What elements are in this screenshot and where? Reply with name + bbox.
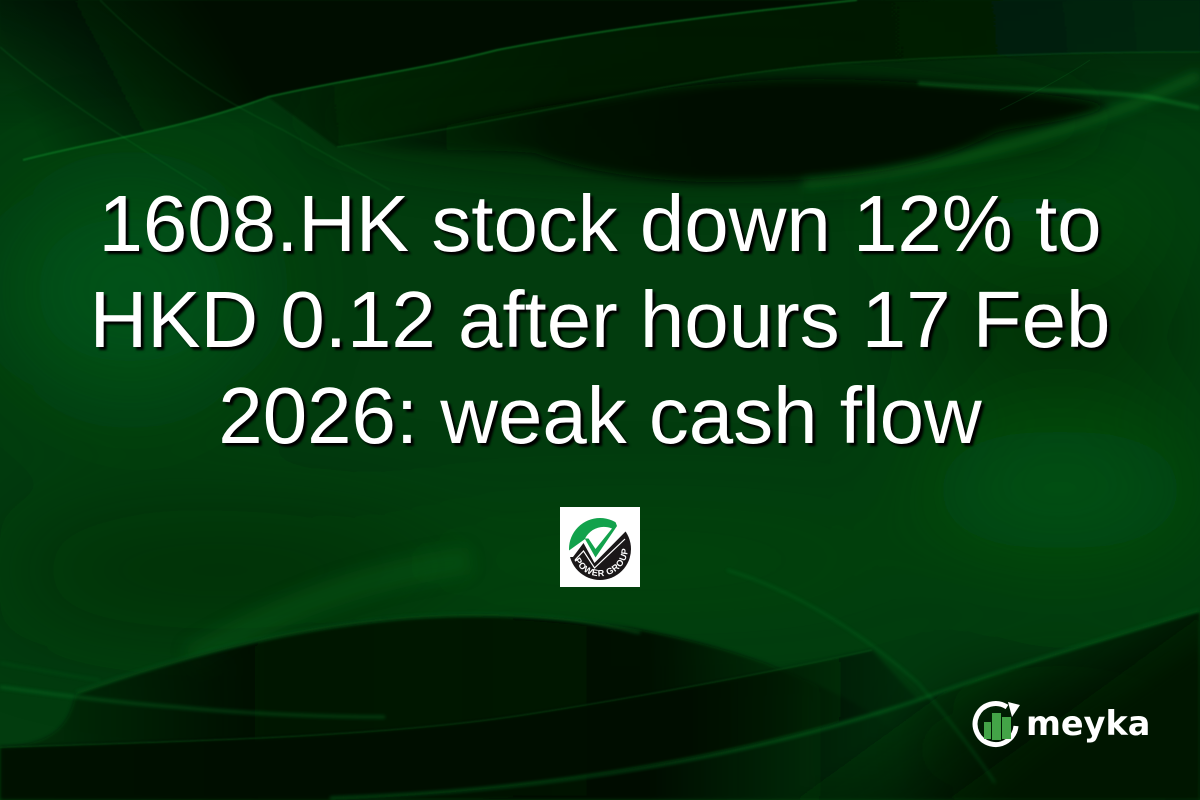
brand: meyka logo: [972, 701, 1150, 748]
title: [90, 179, 1111, 796]
title: 1608.HK stock down 12% to: [98, 179, 1102, 268]
icon: Power Group company logo: POWER GROUP: [574, 548, 628, 576]
wordmark: meyka: [1026, 704, 1150, 743]
title: 2026: weak cash flow: [218, 371, 982, 460]
icon: Power Group company logo: [560, 507, 640, 587]
icon: meyka circular arrow with bars: [972, 701, 1020, 748]
title: HKD 0.12 after hours 17 Feb: [90, 275, 1110, 364]
